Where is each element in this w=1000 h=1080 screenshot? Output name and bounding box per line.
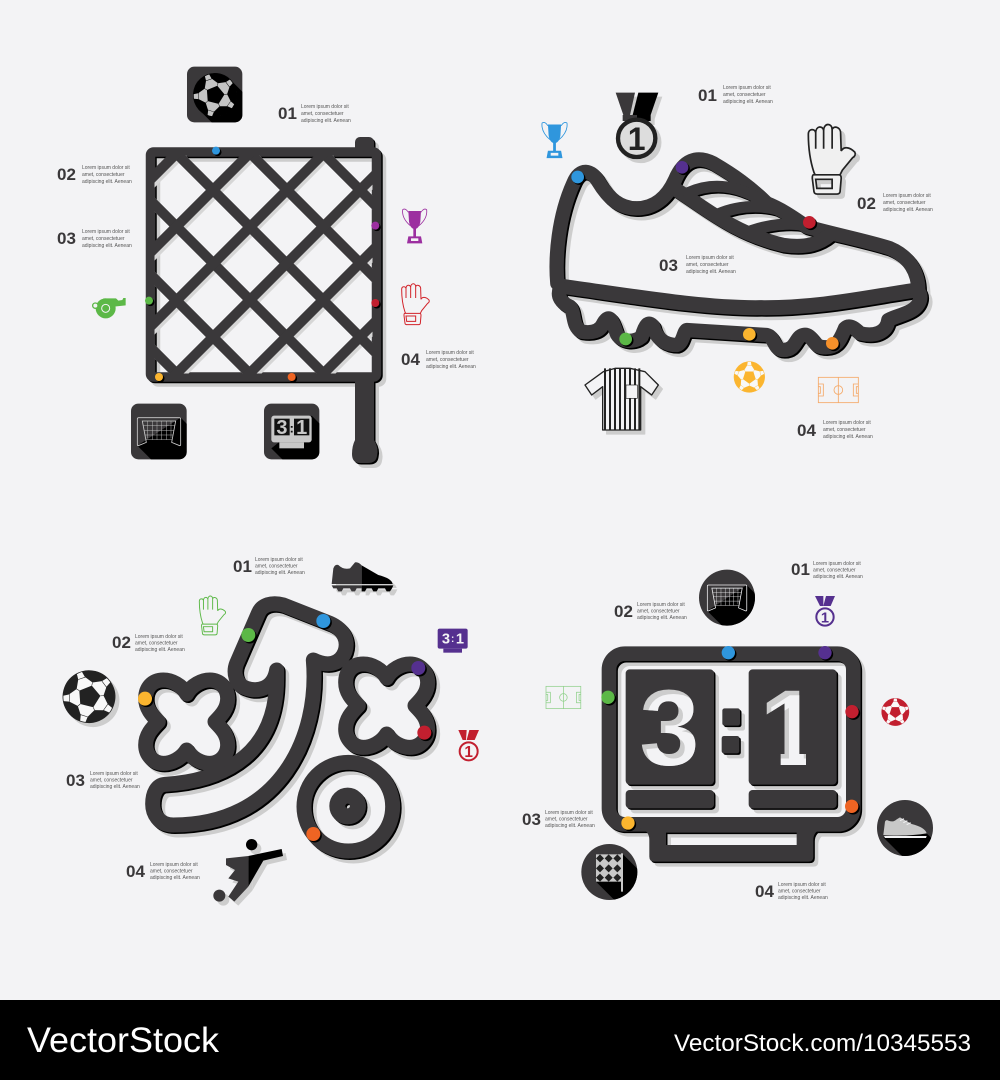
label 04 scoreboard: 04	[755, 882, 774, 901]
label 04 flag: amet, consectetuer	[426, 357, 469, 363]
icon: purple medal: 1	[821, 610, 829, 626]
label 03 scoreboard: 03	[522, 810, 541, 829]
label 03 scoreboard: Lorem ipsum dolor sit	[545, 810, 593, 816]
icon: purple scoreboard: :	[451, 634, 454, 645]
icon: large soccer ball	[54, 664, 124, 733]
label 02 flag: amet, consectetuer	[82, 172, 125, 178]
label 01 flag	[278, 104, 351, 124]
label 03 boot	[659, 255, 736, 275]
icon: scoreboard tile: 3	[276, 417, 288, 439]
tactics connector dots	[138, 614, 431, 841]
label 01 boot: amet, consectetuer	[723, 92, 766, 98]
label 03 flag: Lorem ipsum dolor sit	[82, 229, 130, 235]
icon: scoreboard tile: 1	[296, 417, 307, 439]
label 02 boot: amet, consectetuer	[883, 200, 926, 206]
label 03 tactics: Lorem ipsum dolor sit	[90, 771, 138, 777]
icon: blue trophy	[542, 122, 567, 158]
label 01 tactics	[233, 557, 305, 576]
panel: tactics	[54, 562, 479, 902]
icon: scoreboard tile	[264, 404, 320, 460]
icon: player kicking	[213, 839, 283, 902]
label 04 scoreboard: adipiscing elit. Aenean	[778, 895, 828, 901]
icon: red medal	[458, 730, 479, 761]
label 04 tactics: adipiscing elit. Aenean	[150, 875, 200, 881]
label 02 boot	[857, 193, 933, 213]
icon: referee shirt	[585, 367, 658, 432]
icon: green glove	[199, 596, 226, 635]
icon: black boot	[332, 562, 393, 591]
label 04 scoreboard	[755, 882, 828, 901]
label 03 scoreboard	[522, 810, 595, 829]
label 02 scoreboard: 02	[614, 602, 633, 621]
label 01 boot: adipiscing elit. Aenean	[723, 99, 773, 105]
label 02 scoreboard: adipiscing elit. Aenean	[637, 615, 687, 621]
icon: green pitch	[546, 686, 581, 709]
label 01 flag: Lorem ipsum dolor sit	[301, 104, 349, 110]
label 01 flag: amet, consectetuer	[301, 111, 344, 117]
label 03 scoreboard: amet, consectetuer	[545, 816, 588, 822]
panel: scoreboard	[546, 570, 933, 900]
footer bar: VectorStock.com/10345553	[674, 1030, 971, 1057]
label 01 scoreboard: Lorem ipsum dolor sit	[813, 561, 861, 567]
label 03 tactics: 03	[66, 771, 85, 790]
label 02 boot: 02	[857, 194, 876, 213]
label 04 flag: adipiscing elit. Aenean	[426, 364, 476, 370]
label 04 tactics: Lorem ipsum dolor sit	[150, 862, 198, 868]
label 04 scoreboard: Lorem ipsum dolor sit	[778, 882, 826, 888]
label 02 scoreboard: amet, consectetuer	[637, 608, 680, 614]
label 04 scoreboard: amet, consectetuer	[778, 888, 821, 894]
label 01 tactics: adipiscing elit. Aenean	[255, 570, 305, 576]
icon: soccer ball tile	[187, 66, 242, 122]
label 01 boot: Lorem ipsum dolor sit	[723, 85, 771, 91]
label 02 tactics: adipiscing elit. Aenean	[135, 647, 185, 653]
icon: orange pitch	[818, 377, 858, 403]
label 01 boot	[698, 85, 773, 105]
label 02 flag	[57, 165, 132, 185]
icon: purple scoreboard: 3	[442, 632, 450, 648]
label 01 tactics: amet, consectetuer	[255, 564, 298, 570]
label 03 tactics	[66, 771, 140, 790]
label 04 boot: Lorem ipsum dolor sit	[823, 420, 871, 426]
label 03 tactics: amet, consectetuer	[90, 778, 133, 784]
score digit 3: 3	[639, 668, 699, 788]
digit 1 base cover	[760, 750, 827, 770]
icon: green whistle	[93, 298, 126, 318]
icon: purple trophy	[403, 209, 427, 243]
icon: goal tile	[131, 404, 187, 460]
icon: purple scoreboard: 1	[456, 632, 464, 648]
label 02 tactics: Lorem ipsum dolor sit	[135, 634, 183, 640]
panel: boot	[542, 93, 920, 432]
label 03 tactics: adipiscing elit. Aenean	[90, 784, 140, 790]
icon: red medal: 1	[464, 744, 473, 761]
label 01 scoreboard: amet, consectetuer	[813, 568, 856, 574]
label 02 boot: adipiscing elit. Aenean	[883, 207, 933, 213]
label 03 boot: amet, consectetuer	[686, 262, 729, 268]
tactics drawing	[146, 604, 428, 851]
boot connector dots	[571, 161, 839, 350]
icon: red ball	[874, 692, 916, 734]
label 01 scoreboard: adipiscing elit. Aenean	[813, 574, 863, 580]
scoreboard connector dots	[601, 646, 859, 830]
label 03 flag: amet, consectetuer	[82, 236, 125, 242]
label 03 boot: adipiscing elit. Aenean	[686, 269, 736, 275]
label 02 tactics: 02	[112, 633, 131, 652]
label 02 scoreboard: Lorem ipsum dolor sit	[637, 602, 685, 608]
label 04 boot	[797, 420, 873, 440]
label 04 tactics: 04	[126, 862, 145, 881]
icon: yellow ball	[725, 355, 772, 402]
icon: purple medal	[815, 596, 835, 626]
label 04 flag	[401, 350, 476, 370]
icon: black medal: 1	[628, 121, 646, 157]
label 02 tactics	[112, 633, 185, 653]
label 03 boot: 03	[659, 256, 678, 275]
icon: corner flag circle	[581, 844, 638, 900]
label 04 boot: adipiscing elit. Aenean	[823, 434, 873, 440]
net lines	[154, 156, 372, 374]
label 04 flag: Lorem ipsum dolor sit	[426, 350, 474, 356]
label 03 flag: 03	[57, 229, 76, 248]
footer bar	[0, 1000, 1000, 1080]
label 01 tactics: Lorem ipsum dolor sit	[255, 557, 303, 563]
label 02 flag: adipiscing elit. Aenean	[82, 179, 132, 185]
label 01 flag: 01	[278, 104, 297, 123]
label 02 boot: Lorem ipsum dolor sit	[883, 193, 931, 199]
label 04 flag: 04	[401, 350, 420, 369]
label 03 boot: Lorem ipsum dolor sit	[686, 255, 734, 261]
label 02 scoreboard	[614, 602, 687, 621]
footer bar: VectorStock	[27, 1021, 220, 1060]
icon: boot circle	[877, 800, 933, 856]
label 02 tactics: amet, consectetuer	[135, 640, 178, 646]
label 04 tactics	[126, 862, 200, 881]
label 03 flag	[57, 229, 132, 249]
flag frame and pole	[150, 137, 378, 463]
label 01 scoreboard	[791, 560, 863, 580]
label 01 boot: 01	[698, 86, 717, 105]
scoreboard drawing	[609, 654, 853, 862]
icon: scoreboard tile: :	[289, 421, 294, 436]
icon: purple scoreboard	[438, 629, 468, 653]
label 02 flag: 02	[57, 165, 76, 184]
panel: corner flag	[92, 66, 430, 468]
net connector dots	[145, 147, 379, 381]
label 03 flag: adipiscing elit. Aenean	[82, 243, 132, 249]
score digit 1: 1	[759, 668, 819, 788]
icon: red glove	[402, 284, 429, 325]
label 04 boot: 04	[797, 421, 816, 440]
label 01 tactics: 01	[233, 557, 252, 576]
icon: grey glove	[808, 124, 855, 194]
boot drawing	[557, 159, 920, 350]
label 01 flag: adipiscing elit. Aenean	[301, 118, 351, 124]
icon: goal circle	[699, 570, 755, 626]
icon: black medal	[616, 93, 658, 157]
label 04 tactics: amet, consectetuer	[150, 868, 193, 874]
label 02 flag: Lorem ipsum dolor sit	[82, 165, 130, 171]
label 03 scoreboard: adipiscing elit. Aenean	[545, 823, 595, 829]
label 01 scoreboard: 01	[791, 560, 810, 579]
label 04 boot: amet, consectetuer	[823, 427, 866, 433]
